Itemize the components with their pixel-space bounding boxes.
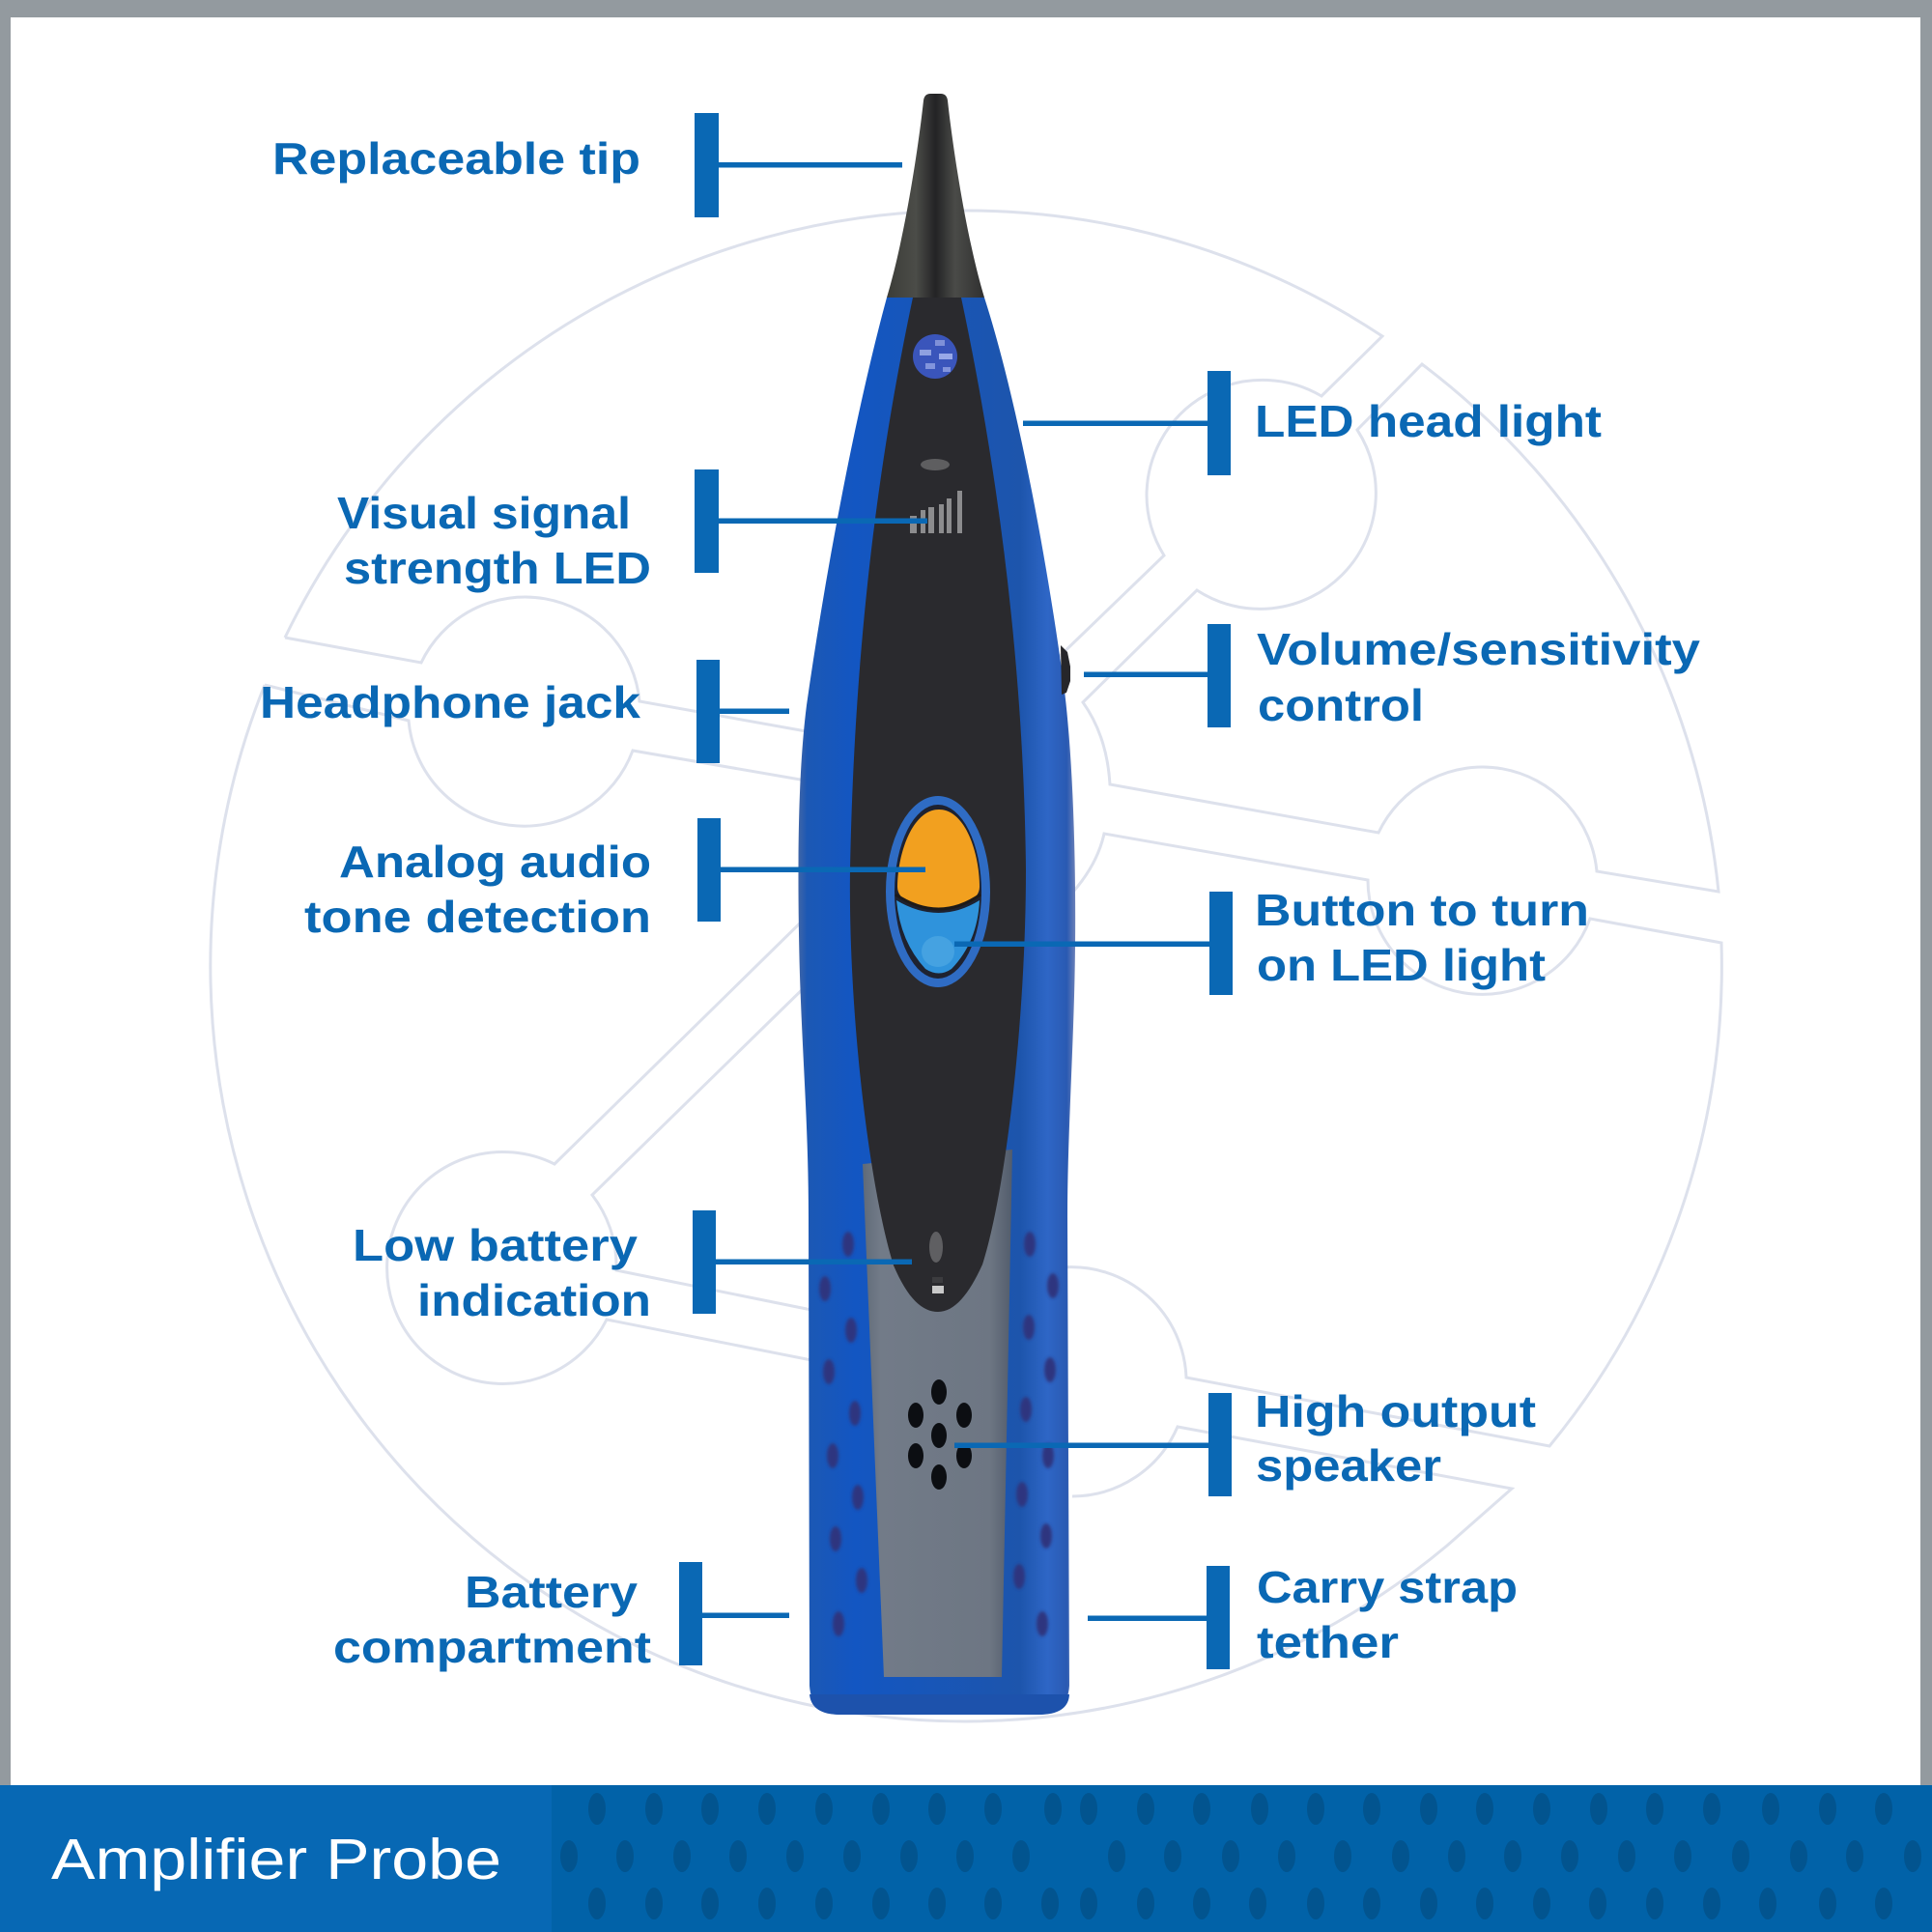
callout: Headphone jack <box>260 660 789 763</box>
footer band <box>0 1785 1932 1932</box>
low battery indicator <box>929 1232 944 1293</box>
callout: Low battery indication <box>353 1210 912 1325</box>
callout: Analog audio tone detection: Analog audio <box>339 837 651 887</box>
callout: Volume/sensitivity control: Volume/sensitivity <box>1257 624 1700 674</box>
callout: Button to turn on LED light: Button to turn <box>1255 885 1589 935</box>
dark face panel <box>850 298 1026 1312</box>
callout: Replaceable tip <box>272 113 902 217</box>
callout: Visual signal strength LED: Visual signal <box>337 488 631 538</box>
callout: Volume/sensitivity control <box>1084 624 1700 730</box>
callout: Carry strap tether <box>1088 1562 1518 1669</box>
bottom lip <box>810 1694 1069 1715</box>
speaker holes <box>908 1379 972 1490</box>
background gear outline <box>211 211 1721 1721</box>
callout: Low battery indication: indication <box>417 1275 651 1325</box>
signal strength bars <box>910 491 962 533</box>
callout: Analog audio tone detection: tone detection <box>304 892 651 942</box>
gray lower panel <box>863 1150 1012 1677</box>
callout: Carry strap tether: Carry strap <box>1257 1562 1518 1612</box>
main button <box>886 796 990 987</box>
callout: Button to turn on LED light <box>954 885 1589 995</box>
callout: High output speaker <box>954 1386 1536 1496</box>
LED head light window <box>921 459 950 470</box>
probe device <box>798 94 1075 1715</box>
callout: High output speaker: speaker <box>1256 1440 1441 1491</box>
logo badge <box>913 334 957 379</box>
device tip <box>887 94 984 298</box>
callout: Battery compartment: compartment <box>333 1622 651 1672</box>
volume wheel <box>1061 645 1070 695</box>
callout: Volume/sensitivity control: control <box>1258 680 1424 730</box>
callout: Button to turn on LED light: on LED light <box>1257 940 1546 990</box>
footer dot pattern <box>560 1793 1921 1919</box>
footer title: Amplifier Probe <box>51 1828 501 1891</box>
callout: Headphone jack: Headphone jack <box>260 677 640 727</box>
callout: Low battery indication: Low battery <box>353 1220 638 1270</box>
device body <box>798 298 1075 1715</box>
grip holes <box>819 1232 1059 1636</box>
callout: Visual signal strength LED <box>337 469 927 593</box>
callout: LED head light: LED head light <box>1255 396 1602 446</box>
callout: Analog audio tone detection <box>304 818 925 942</box>
callout: Replaceable tip: Replaceable tip <box>272 133 640 184</box>
callout: Battery compartment: Battery <box>465 1567 638 1617</box>
callout: High output speaker: High output <box>1255 1386 1536 1436</box>
callout: Battery compartment <box>333 1562 789 1672</box>
callout: Carry strap tether: tether <box>1257 1617 1399 1667</box>
callout: LED head light <box>1023 371 1602 475</box>
callout: Visual signal strength LED: strength LED <box>344 543 651 593</box>
